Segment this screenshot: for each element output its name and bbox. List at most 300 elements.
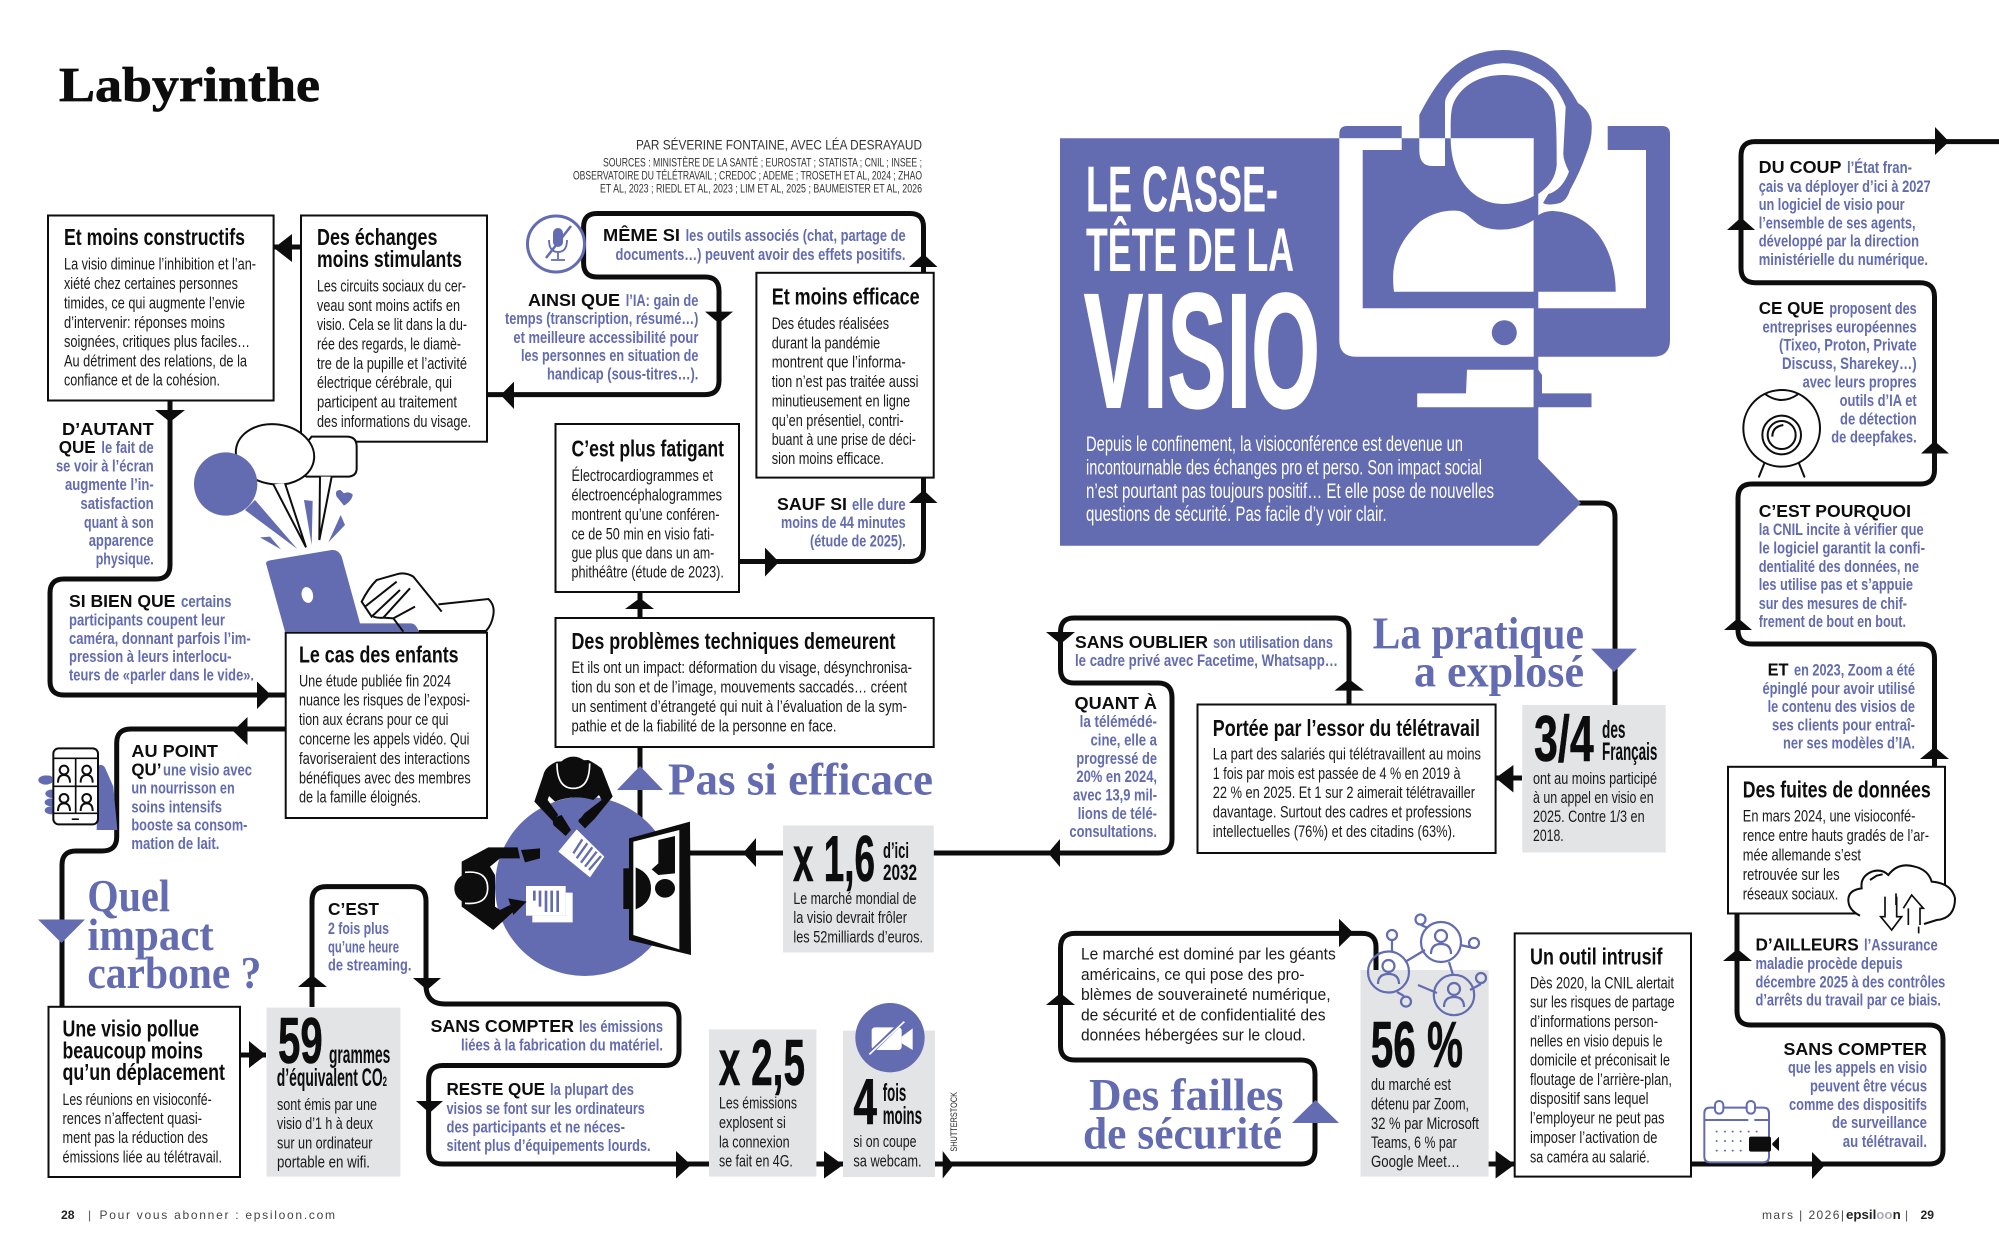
panel: des échanges moins stimulants: rée des regards, le diamè- <box>317 334 461 354</box>
icon: calendar with camera <box>1704 1101 1779 1162</box>
text: sauf si: SAUF SI <box>777 494 847 514</box>
flow arrow: right column path <box>1724 127 1999 767</box>
hero panel: le casse-tête de la visio: incontournable des échanges pro et perso. Son impact social <box>1086 456 1482 480</box>
flow arrow: market line and quant à, sans oublier path <box>690 618 1364 867</box>
hero panel: le casse-tête de la visio <box>1060 50 1670 546</box>
text: sans compter (surveillance): comme des dispositifs <box>1789 1096 1927 1114</box>
panel: un outil intrusif: dispositif sans lequel <box>1530 1089 1648 1108</box>
stat card: x 1,6: x 1,6 <box>793 822 875 895</box>
text: d'autant que: le fait de <box>101 439 154 457</box>
text: sauf si: moins de 44 minutes <box>781 514 906 532</box>
panel: c'est plus fatigant <box>556 424 739 592</box>
flow arrow: box 2 to box 1 <box>274 234 301 262</box>
stat card: x 1,6: Le marché mondial de <box>793 889 916 908</box>
panel: et moins constructifs <box>48 216 274 400</box>
panel: et moins constructifs: d’intervenir: réponses moins <box>64 313 225 332</box>
panel: un outil intrusif: Un outil intrusif <box>1530 943 1663 969</box>
panel: et moins efficace <box>756 273 934 478</box>
text: même si: documents…) peuvent avoir des effets positifs. <box>616 246 906 264</box>
text: si bien que: participants coupent leur <box>69 612 225 630</box>
panel: portée par l'essor du télétravail: Portée par l’essor du télétravail <box>1213 715 1480 741</box>
text: d'autant que: apparence <box>89 532 154 550</box>
text: c'est pourquoi: le logiciel garantit la confi- <box>1759 540 1925 558</box>
text: d'ailleurs: maladie procède depuis <box>1756 955 1903 973</box>
panel: et moins constructifs: Et moins constructifs <box>64 224 245 250</box>
stat card: 4 fois moins: sa webcam. <box>853 1151 922 1170</box>
panel: et moins efficace: montrent que l’informa- <box>772 353 906 372</box>
panel: portée par l'essor du télétravail: intellectuelles (76%) et des citadins (63%). <box>1213 822 1456 841</box>
text: du coup: çais va déployer d’ici à 2027 <box>1759 178 1931 196</box>
text: au point qu': mation de lait. <box>131 835 219 853</box>
panel: portée par l'essor du télétravail: La part des salariés qui télétravaillent au moins <box>1213 745 1481 764</box>
stat card: x 1,6: 2032 <box>883 860 917 885</box>
panel: un outil intrusif: Dès 2020, la CNIL alertait <box>1530 974 1674 992</box>
panel: des fuites de données: retrouvée sur les <box>1743 865 1840 884</box>
panel: une visio pollue: beaucoup moins <box>62 1037 203 1063</box>
stat card: 59 grammes <box>267 1004 400 1177</box>
text: c'est pourquoi: C’EST POURQUOI <box>1759 501 1911 521</box>
flow arrow: une visio pollue to 59 grammes <box>240 1041 266 1068</box>
text: sans compter (matériel): SANS COMPTER <box>430 1016 574 1036</box>
panel: une visio pollue: ment pas la réduction des <box>62 1128 208 1147</box>
hero panel: le casse-tête de la visio: LE CASSE- <box>1086 152 1278 226</box>
panel: le cas des enfants: favoriseraient des interactions <box>299 749 470 768</box>
panel: un outil intrusif: sa caméra au salarié. <box>1530 1147 1650 1166</box>
heading: la pratique a explosé <box>1373 609 1584 697</box>
text: même si <box>603 224 906 264</box>
text: d'autant que: QUE <box>59 437 96 457</box>
text: quant à: avec 13,9 mil- <box>1073 786 1157 804</box>
stat card: 59 grammes: grammes <box>329 1041 390 1069</box>
panel: des fuites de données <box>1728 767 1945 914</box>
footer left: Pour vous abonner : epsiloon.com <box>100 1208 335 1222</box>
hero panel: le casse-tête de la visio: TÊTE DE LA <box>1086 216 1294 284</box>
stat card: 3/4 des français: 2018. <box>1533 826 1564 845</box>
panel: le cas des enfants: de la famille éloignés. <box>299 788 421 806</box>
stat card: 4 fois moins: fois <box>883 1079 906 1107</box>
text: quant à: la télémédé- <box>1080 713 1157 731</box>
text: ainsi que: l’IA: gain de <box>626 292 698 310</box>
panel: c'est plus fatigant: phithéâtre (étude de 2023). <box>572 563 724 582</box>
text: ce que: entreprises européennes <box>1762 318 1917 336</box>
text: même si: les outils associés (chat, partage de <box>686 227 906 245</box>
flow arrow: hero to la pratique <box>1575 503 1637 705</box>
text: c'est pourquoi: dentialité des données, ne <box>1759 558 1919 576</box>
text: au point qu': une visio avec <box>163 762 252 780</box>
stat card: 3/4 des français: Français <box>1602 738 1657 766</box>
heading: quel impact carbone: Quel <box>87 871 170 921</box>
byline and sources: OBSERVATOIRE DU TÉLÉTRAVAIL ; CREDOC ; ADEME ; TROSETH ET AL, 2024 ; ZHAO <box>573 170 922 182</box>
flow arrow: bottom right path <box>1691 913 1943 1179</box>
byline and sources: ET AL, 2023 ; RIEDL ET AL, 2023 ; LIM ET AL, 2025 ; BAUMEISTER ET AL, 2026 <box>600 184 922 196</box>
text: du coup: l’ensemble de ses agents, <box>1759 214 1916 232</box>
panel: des échanges moins stimulants: participent au traitement <box>317 393 457 412</box>
panel: un outil intrusif <box>1515 933 1691 1177</box>
panel: des échanges moins stimulants: Les circuits sociaux du cer- <box>317 276 466 295</box>
footer right: 29 <box>1920 1208 1934 1222</box>
text: d'ailleurs: l’Assurance <box>1864 936 1938 954</box>
text: reste que: sitent plus d’équipements lourds. <box>446 1137 651 1155</box>
text: le marché est dominé <box>1081 945 1336 1044</box>
flow arrow: sauf si path <box>739 478 938 576</box>
text: du coup <box>1759 157 1931 269</box>
panel: le cas des enfants: Le cas des enfants <box>299 641 459 667</box>
heading: des failles de sécurité <box>1083 1070 1339 1158</box>
panel: des échanges moins stimulants: Des échanges <box>317 224 438 250</box>
text: quant à <box>1069 692 1158 841</box>
text: si bien que: caméra, donnant parfois l’im- <box>69 630 251 648</box>
text: ce que: outils d’IA et <box>1840 392 1917 410</box>
panel: des problèmes techniques demeurent: un sentiment d’étrangeté qui nuit à l’évaluation de la sym- <box>572 697 907 716</box>
text: ainsi que <box>505 290 699 384</box>
icon: muted microphone <box>528 216 584 272</box>
stat card: 59 grammes: d’équivalent CO2 <box>277 1064 387 1092</box>
heading: la pratique a explosé: a explosé <box>1414 647 1584 697</box>
stat card: 3/4 des français: à un appel en visio en <box>1533 788 1654 807</box>
stat card: 59 grammes: 59 <box>278 1004 323 1077</box>
text: d'autant que: se voir à l’écran <box>56 458 154 476</box>
text: le marché est dominé: Le marché est dominé par les géants <box>1081 945 1336 964</box>
text: d'ailleurs: D’AILLEURS <box>1756 934 1859 954</box>
panel: un outil intrusif: nelles en visio depuis le <box>1530 1032 1662 1050</box>
text: sans compter (surveillance): au télétravail. <box>1843 1133 1927 1151</box>
text: au point qu': booste sa consom- <box>131 817 247 835</box>
stat card: 4 fois moins <box>843 1031 935 1177</box>
panel: des échanges moins stimulants: des informations du visage. <box>317 412 471 431</box>
icon: cloud upload and download <box>1848 865 1955 933</box>
panel: un outil intrusif: l’employeur ne peut pas <box>1530 1108 1664 1127</box>
panel: et moins constructifs: confiance et de la cohésion. <box>64 370 220 390</box>
text: quant à: lions de télé- <box>1078 805 1157 823</box>
text: c'est: 2 fois plus <box>328 920 389 938</box>
icon: webcam <box>1743 390 1820 477</box>
panel: et moins constructifs: timides, ce qui augmente l’envie <box>64 293 245 312</box>
stat card: 3/4 des français: 3/4 <box>1534 702 1594 775</box>
panel: des fuites de données: réseaux sociaux. <box>1743 884 1838 903</box>
panel: des problèmes techniques demeurent: pathie et de la fiabilité de la personne en face. <box>572 716 836 736</box>
flow arrow: c'est, sans compter, reste que path <box>298 887 709 1178</box>
panel: et moins efficace: sion moins efficace. <box>772 449 884 468</box>
text: sans compter (surveillance): SANS COMPTER <box>1784 1039 1927 1059</box>
stat card: x 1,6: d’ici <box>883 838 909 863</box>
stat card: 59 grammes: sont émis par une <box>277 1095 377 1114</box>
text: sans compter (surveillance): de surveillance <box>1832 1114 1927 1132</box>
text: au point qu': un nourrisson en <box>131 780 235 798</box>
panel: un outil intrusif: imposer l’activation de <box>1530 1128 1657 1147</box>
panel: un outil intrusif: floutage de l’arrière-plan, <box>1530 1070 1672 1089</box>
text: au point qu': QU’ <box>131 760 161 780</box>
flow arrow: bottom line through security loop <box>816 919 1376 1178</box>
flow arrow: au point que path to carbon section <box>38 717 286 1007</box>
panel: des fuites de données: En mars 2024, une visioconfé- <box>1743 806 1915 826</box>
text: sauf si: elle dure <box>852 496 906 514</box>
text: du coup: ministérielle du numérique. <box>1759 251 1928 269</box>
text: reste que <box>446 1079 651 1155</box>
flow arrow: même si and ainsi que path <box>487 214 938 409</box>
text: d'ailleurs: décembre 2025 à des contrôles <box>1756 973 1945 991</box>
panel: et moins efficace: Des études réalisées <box>772 314 889 333</box>
heading: des failles de sécurité: de sécurité <box>1083 1108 1282 1158</box>
text: et (zoom) <box>1762 660 1915 752</box>
stat card: 3/4 des français: des <box>1602 716 1626 744</box>
text: si bien que: teurs de «parler dans le vide». <box>69 666 254 684</box>
text: au point qu': AU POINT <box>131 741 218 761</box>
text: sans compter (matériel): liées à la fabrication du matériel. <box>461 1036 663 1054</box>
text: quant à: progressé de <box>1076 750 1157 768</box>
footer left: | <box>88 1208 91 1222</box>
panel: le cas des enfants: tion aux écrans pour ce qui <box>299 710 448 729</box>
text: du coup: DU COUP <box>1759 157 1842 177</box>
panel: des échanges moins stimulants: électrique cérébrale, qui <box>317 373 452 392</box>
panel: et moins efficace: durant la pandémie <box>772 333 880 352</box>
text: le marché est dominé: données hébergées sur le cloud. <box>1081 1026 1306 1044</box>
footer right: epsiloon <box>1846 1207 1901 1222</box>
heading: pas si efficace: Pas si efficace <box>668 754 933 804</box>
panel: des problèmes techniques demeurent: tion du son et de l’image, mouvements saccadés… créent <box>572 678 907 697</box>
text: si bien que: pression à leurs interlocu- <box>69 648 232 666</box>
panel: des fuites de données: rence entre hauts gradés de l’ar- <box>1743 826 1929 845</box>
panel: un outil intrusif: sur les risques de partage <box>1530 993 1675 1012</box>
text: sans compter (surveillance): peuvent être vécus <box>1810 1078 1927 1096</box>
panel: c'est plus fatigant: gue plus que dans un am- <box>572 544 714 563</box>
text: le marché est dominé: blèmes de souveraineté numérique, <box>1081 985 1331 1004</box>
text: d'autant que <box>56 419 154 569</box>
stat card: 56 %: 56 % <box>1371 1008 1463 1081</box>
stat card: 56 %: Google Meet… <box>1371 1152 1460 1171</box>
panel: un outil intrusif: d’informations person- <box>1530 1012 1658 1031</box>
text: du coup: développé par la direction <box>1759 233 1919 251</box>
hero panel: le casse-tête de la visio: questions de sécurité. Pas facile d’y voir clair. <box>1086 502 1387 526</box>
panel: une visio pollue: Une visio pollue <box>62 1016 199 1042</box>
text: reste que: visios se font sur les ordinateurs <box>446 1100 645 1118</box>
panel: des fuites de données: Des fuites de données <box>1743 776 1931 802</box>
panel: une visio pollue: rences n’affectent quasi- <box>62 1109 202 1128</box>
text: quant à: QUANT À <box>1074 692 1157 713</box>
stat card: 59 grammes: visio d’1 h à deux <box>277 1114 373 1133</box>
text: et (zoom): en 2023, Zoom a été <box>1794 662 1915 680</box>
panel: portée par l'essor du télétravail: 22 % en 2025. Et 1 sur 2 aimerait télétravailler <box>1213 783 1475 802</box>
text: le marché est dominé: de sécurité et de confidentialité des <box>1081 1005 1326 1024</box>
panel: le cas des enfants: Une étude publiée fin 2024 <box>299 672 451 691</box>
panel: c'est plus fatigant: Électrocardiogrammes et <box>572 466 713 485</box>
text: sans oublier <box>1075 632 1338 670</box>
panel: une visio pollue: émissions liée au télétravail. <box>62 1148 222 1167</box>
icon: webcam off <box>855 1003 925 1072</box>
flow arrow: pas si efficace vertical <box>617 592 663 830</box>
text: et (zoom): ET <box>1768 660 1789 680</box>
panel: le cas des enfants: nuance les risques de l’exposi- <box>299 691 470 710</box>
stat card: x 2,5: Les émissions <box>719 1094 797 1113</box>
hero panel: le casse-tête de la visio: Depuis le confinement, la visioconférence est devenue un <box>1086 432 1463 456</box>
text: c'est <box>328 899 411 975</box>
text: au point qu': soins intensifs <box>131 798 222 816</box>
stat card: 56 %: 32 % par Microsoft <box>1371 1114 1479 1133</box>
panel: des échanges moins stimulants: veau sont moins actifs en <box>317 296 460 315</box>
panel: une visio pollue: qu’un déplacement <box>62 1059 225 1085</box>
panel: le cas des enfants: bénéfiques avec des membres <box>299 768 471 787</box>
text: reste que: RESTE QUE <box>446 1079 545 1099</box>
heading: quel impact carbone: impact <box>87 910 214 960</box>
heading: la pratique a explosé: La pratique <box>1373 609 1584 659</box>
text: au point qu' <box>131 741 252 853</box>
text: et (zoom): épinglé pour avoir utilisé <box>1762 680 1915 698</box>
text: ce que: Discuss, Sharekey…) <box>1782 355 1917 373</box>
text: quant à: 20% en 2024, <box>1076 768 1157 786</box>
text: sauf si <box>777 494 906 550</box>
panel: des problèmes techniques demeurent: Et ils ont un impact: déformation du visage, désynchronisa- <box>572 658 912 677</box>
text: ainsi que: AINSI QUE <box>528 290 620 310</box>
stat card: 56 % <box>1360 970 1489 1177</box>
panel: des échanges moins stimulants: moins stimulants <box>317 246 462 272</box>
flow arrow: 3/4 to portée <box>1495 765 1522 792</box>
text: d'ailleurs <box>1756 934 1945 1010</box>
text: ainsi que: les personnes en situation de <box>521 347 698 365</box>
flow arrow: 56 % to un outil intrusif <box>1488 1151 1515 1178</box>
byline and sources: PAR SÉVERINE FONTAINE, AVEC LÉA DESRAYAUD <box>636 138 922 152</box>
stat card: x 2,5: x 2,5 <box>719 1026 805 1099</box>
panel: et moins constructifs: soignées, critiques plus faciles… <box>64 332 250 351</box>
panel: portée par l'essor du télétravail <box>1198 704 1496 853</box>
panel: portée par l'essor du télétravail: davantage. Surtout des cadres et professions <box>1213 802 1471 822</box>
text: c'est: C’EST <box>328 899 379 919</box>
stat card: 56 %: Teams, 6 % par <box>1371 1133 1457 1152</box>
footer right <box>1762 1207 1934 1222</box>
text: ce que: de détection <box>1840 410 1917 428</box>
stat card: 3/4 des français <box>1522 702 1666 852</box>
icon: phone with video call <box>38 748 117 830</box>
text: ce que: de deepfakes. <box>1831 428 1917 446</box>
stat card: x 2,5: se fait en 4G. <box>719 1152 793 1171</box>
footer right: | <box>1905 1208 1908 1222</box>
stat card: 59 grammes: sur un ordinateur <box>277 1133 373 1152</box>
text: ce que: (Tixeo, Proton, Private <box>1779 337 1917 355</box>
text: d'autant que: D’AUTANT <box>62 419 154 439</box>
credit: shutterstock: SHUTTERSTOCK <box>949 1091 960 1152</box>
hero panel: le casse-tête de la visio: n’est pourtant pas toujours positif… Et elle pose de nouvelles <box>1086 479 1494 503</box>
text: ainsi que: handicap (sous-titres…). <box>547 366 698 384</box>
text: reste que: des participants et ne néces- <box>446 1118 625 1136</box>
stat card: x 2,5: la connexion <box>719 1133 790 1152</box>
panel: des problèmes techniques demeurent <box>556 618 934 747</box>
panel: c'est plus fatigant: montrent qu’une conféren- <box>572 505 720 524</box>
panel: des fuites de données: mée allemande s’est <box>1743 845 1861 864</box>
illustration: laptop, speech bubbles and hand <box>194 419 494 632</box>
text: c'est pourquoi: frement de bout en bout. <box>1759 613 1906 631</box>
text: c'est pourquoi: la CNIL incite à vérifier que <box>1759 521 1924 539</box>
text: du coup: l’État fran- <box>1847 158 1912 177</box>
text: ce que: proposent des <box>1829 300 1917 318</box>
text: si bien que <box>69 591 254 684</box>
stat card: x 1,6 <box>783 822 934 952</box>
stat card: x 2,5 <box>709 1026 816 1177</box>
panel: c'est plus fatigant: C’est plus fatigant <box>572 436 724 462</box>
illustration: meeting table from above <box>454 757 691 976</box>
text: sans compter (matériel) <box>430 1016 663 1054</box>
text: et (zoom): ner ses modèles d’IA. <box>1783 734 1915 752</box>
panel: portée par l'essor du télétravail: 1 fois par mois est passée de 4 % en 2019 à <box>1213 764 1461 783</box>
text: du coup: un logiciel de visio pour <box>1759 196 1905 214</box>
text: sauf si: (étude de 2025). <box>810 532 906 550</box>
text: et (zoom): ses clients pour entraî- <box>1772 717 1915 735</box>
panel: des problèmes techniques demeurent: Des problèmes techniques demeurent <box>572 628 896 654</box>
stat card: 56 %: détenu par Zoom, <box>1371 1094 1469 1114</box>
text: c'est pourquoi: les utilise pas et s’appuie <box>1759 576 1913 594</box>
text: sans oublier: son utilisation dans <box>1213 634 1333 652</box>
text: et (zoom): le contenu des visios de <box>1768 698 1915 716</box>
flow arrow: d'autant que and si bien que path <box>50 400 286 709</box>
text: quant à: consultations. <box>1069 823 1157 841</box>
text: le marché est dominé: américains, ce qui pose des pro- <box>1081 965 1304 984</box>
panel: des échanges moins stimulants: tre de la pupille et l’activité <box>317 354 467 373</box>
text: sans compter (matériel): les émissions <box>579 1018 663 1036</box>
panel: et moins efficace: tion n’est pas traitée aussi <box>772 372 918 391</box>
text: d'autant que: physique. <box>96 551 154 569</box>
text: d'autant que: augmente l’in- <box>65 476 154 494</box>
text: ce que: CE QUE <box>1759 298 1824 318</box>
text: reste que: la plupart des <box>550 1081 634 1099</box>
text: ainsi que: et meilleure accessibilité pour <box>513 329 699 347</box>
stat card: 59 grammes: portable en wifi. <box>277 1152 370 1172</box>
text: sans oublier: le cadre privé avec Facetime, Whatsapp… <box>1075 652 1338 670</box>
stat card: x 1,6: la visio devrait frôler <box>793 908 907 927</box>
stat card: 3/4 des français: ont au moins participé <box>1533 769 1657 788</box>
text: si bien que: SI BIEN QUE <box>69 591 175 611</box>
text: ainsi que: temps (transcription, résumé…) <box>505 310 698 328</box>
panel: le cas des enfants: concerne les appels vidéo. Qui <box>299 730 469 749</box>
heading: des failles de sécurité: Des failles <box>1089 1070 1284 1120</box>
panel: et moins constructifs: xiété chez certaines personnes <box>64 274 238 293</box>
text: ce que: avec leurs propres <box>1803 374 1917 392</box>
text: sans compter (surveillance): que les appels en visio <box>1788 1059 1927 1077</box>
icon: people network <box>1368 914 1486 1015</box>
stat card: 3/4 des français: 2025. Contre 1/3 en <box>1533 807 1645 826</box>
panel: une visio pollue: Les réunions en visioconfé- <box>62 1090 212 1109</box>
footer right: mars | 2026| <box>1762 1208 1844 1222</box>
text: quant à: cine, elle a <box>1090 731 1158 749</box>
text: d'autant que: quant à son <box>84 514 154 532</box>
panel: et moins efficace: Et moins efficace <box>772 284 920 310</box>
stat card: 4 fois moins: 4 <box>853 1065 877 1138</box>
panel: et moins constructifs: La visio diminue l’inhibition et l’an- <box>64 255 256 274</box>
text: même si: MÊME SI <box>603 224 680 245</box>
stat card: 4 fois moins: si on coupe <box>853 1132 916 1151</box>
panel: des échanges moins stimulants: visio. Cela se lit dans la du- <box>317 315 467 334</box>
text: ce que <box>1759 298 1917 446</box>
title: Labyrinthe <box>59 57 320 112</box>
footer left: 28 <box>61 1208 75 1222</box>
panel: une visio pollue <box>48 1007 240 1177</box>
text: c'est: de streaming. <box>328 957 411 975</box>
panel: le cas des enfants <box>286 633 487 818</box>
panel: des échanges moins stimulants <box>301 216 487 442</box>
text: d'ailleurs: d’arrêts du travail par ce biais. <box>1756 992 1941 1010</box>
stat card: x 1,6: les 52milliards d’euros. <box>793 928 923 946</box>
panel: et moins efficace: buant à une prise de déci- <box>772 430 916 449</box>
hero panel: le casse-tête de la visio: VISIO <box>1084 259 1320 442</box>
text: c'est pourquoi: sur des mesures de chif- <box>1759 595 1907 613</box>
heading: quel impact carbone <box>87 871 261 998</box>
text: d'autant que: satisfaction <box>80 495 154 513</box>
panel: et moins efficace: minutieusement en ligne <box>772 392 910 410</box>
text: sans oublier: SANS OUBLIER <box>1075 632 1208 652</box>
text: c'est pourquoi <box>1759 501 1925 631</box>
byline and sources <box>573 138 922 196</box>
panel: c'est plus fatigant: électroencéphalogrammes <box>572 486 722 505</box>
heading: quel impact carbone: carbone ? <box>87 948 261 998</box>
text: sans compter (surveillance) <box>1784 1039 1927 1151</box>
text: si bien que: certains <box>181 593 232 611</box>
stat card: x 2,5: explosent si <box>719 1113 786 1132</box>
